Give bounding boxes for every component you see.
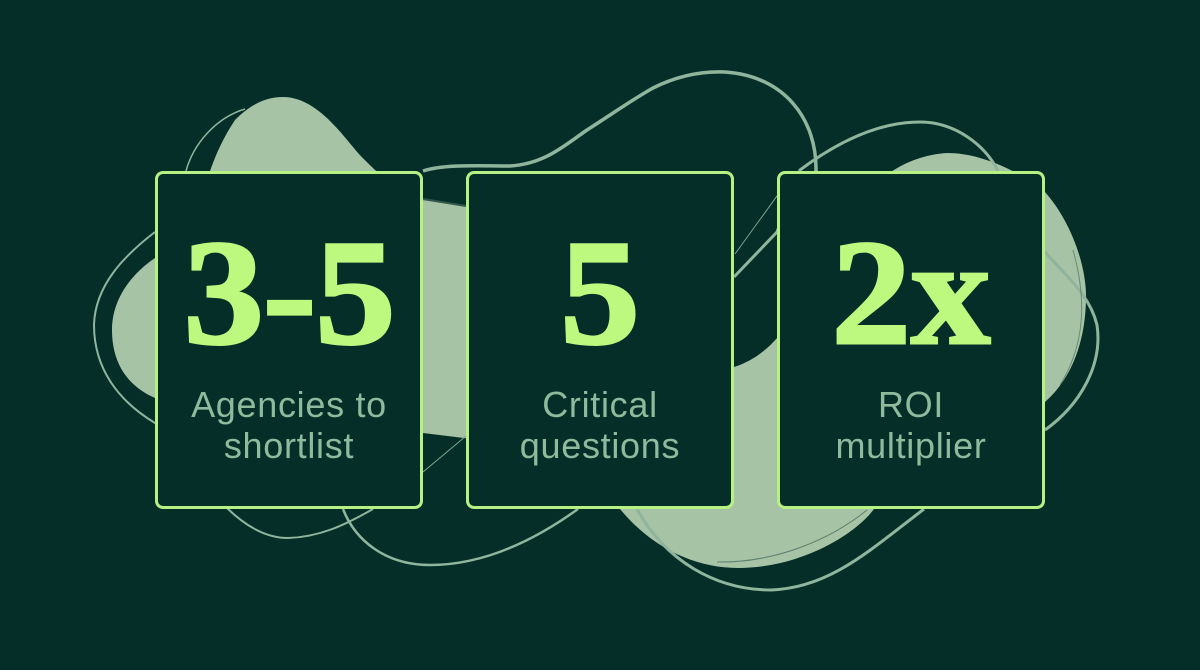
line: thin dark inside right blob bottom — [717, 510, 867, 562]
line: upper right arc — [734, 122, 998, 277]
label: agencies to shortlist: shortlist — [224, 425, 354, 466]
number: 3-5: 3-5 — [184, 210, 394, 376]
line: left outer loop — [94, 232, 373, 538]
blob: left — [112, 97, 480, 440]
line: thin diagonal — [735, 170, 800, 254]
label: agencies to shortlist: Agencies to — [191, 384, 387, 425]
card: ROI multiplier — [777, 171, 1045, 509]
line: thin dark inside right blob edge — [1060, 250, 1082, 385]
card: critical questions — [466, 171, 734, 509]
card: agencies to shortlist — [155, 171, 423, 509]
line: small arc above left blob — [186, 109, 245, 171]
number: 5: 5 — [560, 210, 640, 376]
label: critical questions: Critical — [542, 384, 658, 425]
line: bottom right loop — [637, 509, 924, 590]
label: ROI multiplier: ROI — [878, 384, 944, 425]
label: agencies to shortlist — [191, 384, 387, 466]
label: critical questions: questions — [520, 425, 680, 466]
line: top wave — [423, 72, 816, 171]
label: critical questions — [520, 384, 680, 466]
blob: right — [600, 153, 1086, 568]
number: 2x: 2x — [832, 210, 990, 376]
label: ROI multiplier — [835, 384, 987, 466]
label: ROI multiplier: multiplier — [835, 425, 987, 466]
line: lower middle loop — [343, 509, 578, 565]
line: dark edge in gap — [423, 199, 466, 206]
line: right loop — [1045, 252, 1098, 430]
line: thin diagonal lower — [423, 436, 466, 472]
